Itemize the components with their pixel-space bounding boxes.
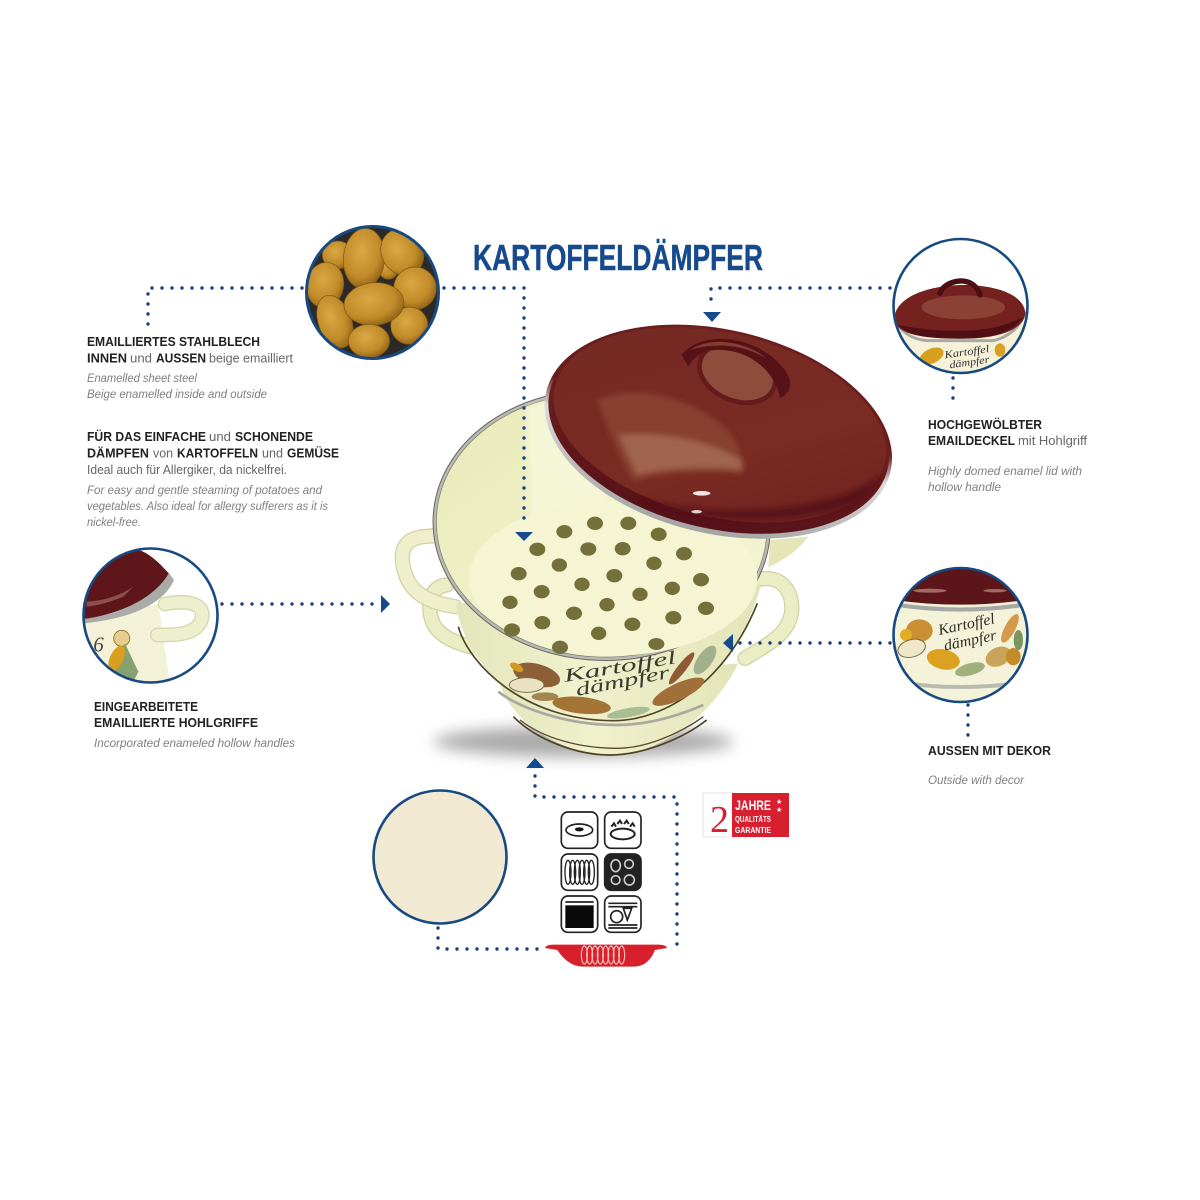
handle circle border <box>84 548 218 682</box>
decor on pot <box>508 642 721 721</box>
silver rim <box>901 604 1020 612</box>
badge: 2 years quality guarantee: QUALITÄTS <box>735 815 772 824</box>
icon: induction lid disc <box>561 812 598 848</box>
decor photo <box>894 569 1026 701</box>
text block: steaming <box>87 429 339 529</box>
right handle <box>745 579 792 658</box>
cooktop compatibility icons <box>545 812 667 967</box>
connector: decor circle to text <box>966 705 970 736</box>
mushroom <box>898 638 926 658</box>
panel: potatoes circle <box>303 221 438 358</box>
yellow vegetable <box>105 643 128 673</box>
pot cream body <box>900 320 1024 372</box>
steamer dark edge <box>458 603 757 721</box>
connector: base to icons <box>535 776 677 949</box>
text block: enamelled steel: Beige enamelled inside and outside <box>87 387 267 401</box>
pot shadow <box>433 726 733 757</box>
panel: decor circle <box>890 563 1030 702</box>
connector: swatch to pan <box>438 928 538 949</box>
lettering second line: dämpfer <box>942 627 999 655</box>
text block: steaming: FÜR DAS EINFACHE <box>87 429 206 444</box>
text block: enamelled steel: INNEN <box>87 352 127 366</box>
lid glint lower <box>691 510 702 513</box>
text block: domed lid <box>928 417 1088 494</box>
yellow vegetable <box>900 629 912 641</box>
light strip on back wall <box>527 397 613 517</box>
text block: steaming: GEMÜSE <box>287 446 339 460</box>
decor: potatoes and carrots <box>649 672 708 711</box>
dome lower band <box>898 317 1023 339</box>
lemon <box>114 630 130 646</box>
text block: steaming: und <box>262 446 283 460</box>
insert holes <box>502 517 714 654</box>
text block: enamelled steel: und <box>130 352 152 366</box>
text block: domed lid: Highly domed enamel lid with <box>928 464 1082 478</box>
text block: steaming: DÄMPFEN <box>87 446 149 460</box>
text block: hollow handles: EINGEARBEITETE <box>94 700 198 714</box>
text block: hollow handles <box>94 700 295 750</box>
connector: handle circle to handle <box>222 602 376 606</box>
icon: ceramic hob <box>605 854 641 890</box>
arrow: handle <box>381 595 390 613</box>
lid reflection light <box>618 434 742 475</box>
potato photo <box>308 228 437 357</box>
potato circle border <box>306 226 438 358</box>
badge: 2 years quality guarantee: JAHRE <box>735 797 771 813</box>
text block: steaming: Ideal auch für Allergiker, da nickelfrei. <box>87 463 287 477</box>
text block: domed lid: hollow handle <box>928 480 1001 494</box>
decor yellow vegetables <box>920 348 944 364</box>
lid reflection <box>597 393 744 482</box>
text block: steaming: SCHONENDE <box>235 430 313 444</box>
lower pot stripes <box>520 717 703 748</box>
decor right vegetable <box>995 343 1005 357</box>
arrow: insert <box>515 532 533 541</box>
lid gloss right <box>983 589 1007 592</box>
badge: 2 years quality guarantee: ★ <box>776 798 782 806</box>
connector: potato to insert <box>444 288 524 528</box>
green leaves <box>114 644 138 680</box>
connector: lid circle to text <box>951 378 955 408</box>
text block: outside decor: Outside with decor <box>928 773 1025 787</box>
lettering on lid crop: Kartoffel <box>943 344 990 361</box>
text block: hollow handles: Incorporated enameled hollow handles <box>94 736 295 750</box>
connector: lid circle to lid <box>711 288 890 308</box>
lower pot body <box>500 663 738 755</box>
decor: script lettering: Kartoffel <box>561 647 678 687</box>
badge: 2 years quality guarantee: ★ <box>776 806 782 814</box>
decor number: 6 <box>93 635 104 657</box>
pot interior wall <box>430 385 774 665</box>
handle <box>157 602 202 635</box>
arrow: lid <box>703 312 721 322</box>
lettering second line: dämpfer <box>949 355 991 371</box>
pot rim <box>426 381 777 669</box>
text block: enamelled steel: AUSSEN <box>156 352 206 366</box>
text block: steaming: vegetables. Also ideal for allergy sufferers as it is <box>87 499 328 513</box>
lid outer band <box>528 295 910 565</box>
lower left handle <box>430 585 470 647</box>
handle inner <box>157 602 202 635</box>
text block: outside decor <box>928 744 1051 787</box>
lower silver rim <box>498 692 703 725</box>
connector: potato to left text <box>148 288 302 326</box>
yellow potato <box>926 649 960 670</box>
icon: oven <box>561 896 598 932</box>
decor: mushrooms <box>511 658 563 692</box>
connector: decor circle to pot <box>738 641 890 645</box>
brown lid band <box>904 569 1017 605</box>
lid lower dark shade <box>633 473 882 520</box>
decor circle border <box>894 568 1028 702</box>
lid handle <box>682 333 790 413</box>
text block: hollow handles: EMAILLIERTE HOHLGRIFFE <box>94 716 258 730</box>
text block: steaming: von <box>153 446 173 460</box>
right potatoes <box>986 646 1010 667</box>
title: KARTOFFELDÄMPFER <box>473 237 763 278</box>
panel: lid circle <box>894 239 1028 377</box>
leaves <box>955 662 985 676</box>
lid glints <box>693 491 710 496</box>
text block: steaming: nickel-free. <box>87 515 141 529</box>
text block: enamelled steel <box>87 335 294 401</box>
badge: 2 years quality guarantee <box>703 793 789 841</box>
decor: leaves <box>606 704 650 721</box>
lid photo <box>894 281 1026 377</box>
lettering: Kartoffel <box>936 610 996 639</box>
decor: potato <box>552 694 612 717</box>
dome highlight <box>922 295 1005 319</box>
steamer body <box>456 583 762 723</box>
silver rim <box>898 312 1026 341</box>
lid dome <box>534 297 906 553</box>
badge: 2 years quality guarantee: GARANTIE <box>735 826 772 835</box>
upper left handle <box>402 536 455 607</box>
lid gloss <box>913 589 947 593</box>
panel: handle circle <box>80 548 217 683</box>
lid silver rim <box>523 293 913 571</box>
back right handle part <box>768 537 808 567</box>
brown lid <box>80 550 169 619</box>
pot body <box>83 603 170 683</box>
handle hole <box>691 333 784 413</box>
steaming insert plate <box>469 501 757 656</box>
onion <box>906 619 933 642</box>
icon: dishwasher <box>605 896 641 932</box>
arrow: decor <box>723 634 733 652</box>
dome <box>894 285 1025 339</box>
handle <box>940 281 980 295</box>
handle arch <box>682 339 790 398</box>
text block: steaming: und <box>209 430 231 444</box>
panel: beige enamel swatch <box>374 790 506 924</box>
greens <box>1014 630 1023 650</box>
handle arch highlight <box>690 342 767 358</box>
arrow: base <box>526 758 544 768</box>
infographic canvas <box>82 225 1087 967</box>
text block: steaming: For easy and gentle steaming of potatoes and <box>87 483 322 497</box>
icon: gas burner <box>605 812 641 848</box>
icon: electric coil <box>561 854 598 890</box>
silver lid rim <box>83 573 174 623</box>
text block: enamelled steel: EMAILLIERTES STAHLBLECH <box>87 335 260 349</box>
text block: outside decor: AUSSEN MIT DEKOR <box>928 744 1051 758</box>
text block: steaming: KARTOFFELN <box>177 446 258 460</box>
lid circle border <box>894 239 1028 373</box>
text block: domed lid: HOCHGEWÖLBTER <box>928 417 1042 432</box>
bottom rim <box>915 682 1006 689</box>
product photo: steamer pot with lid <box>402 293 913 757</box>
badge: 2 years quality guarantee: 2 <box>710 799 729 841</box>
right potato small <box>1006 648 1021 665</box>
lid highlight <box>87 587 133 607</box>
text block: domed lid: mit Hohlgriff <box>1018 434 1088 448</box>
text block: domed lid: EMAILDECKEL <box>928 434 1015 448</box>
text block: enamelled steel: Enamelled sheet steel <box>87 371 197 385</box>
decor on pot: dämpfer <box>574 662 672 701</box>
lower pot base line <box>513 717 707 755</box>
carrot <box>1001 614 1019 643</box>
lid <box>523 293 913 571</box>
text block: enamelled steel: beige emailliert <box>209 352 294 366</box>
icon: red induction pan <box>545 945 667 967</box>
